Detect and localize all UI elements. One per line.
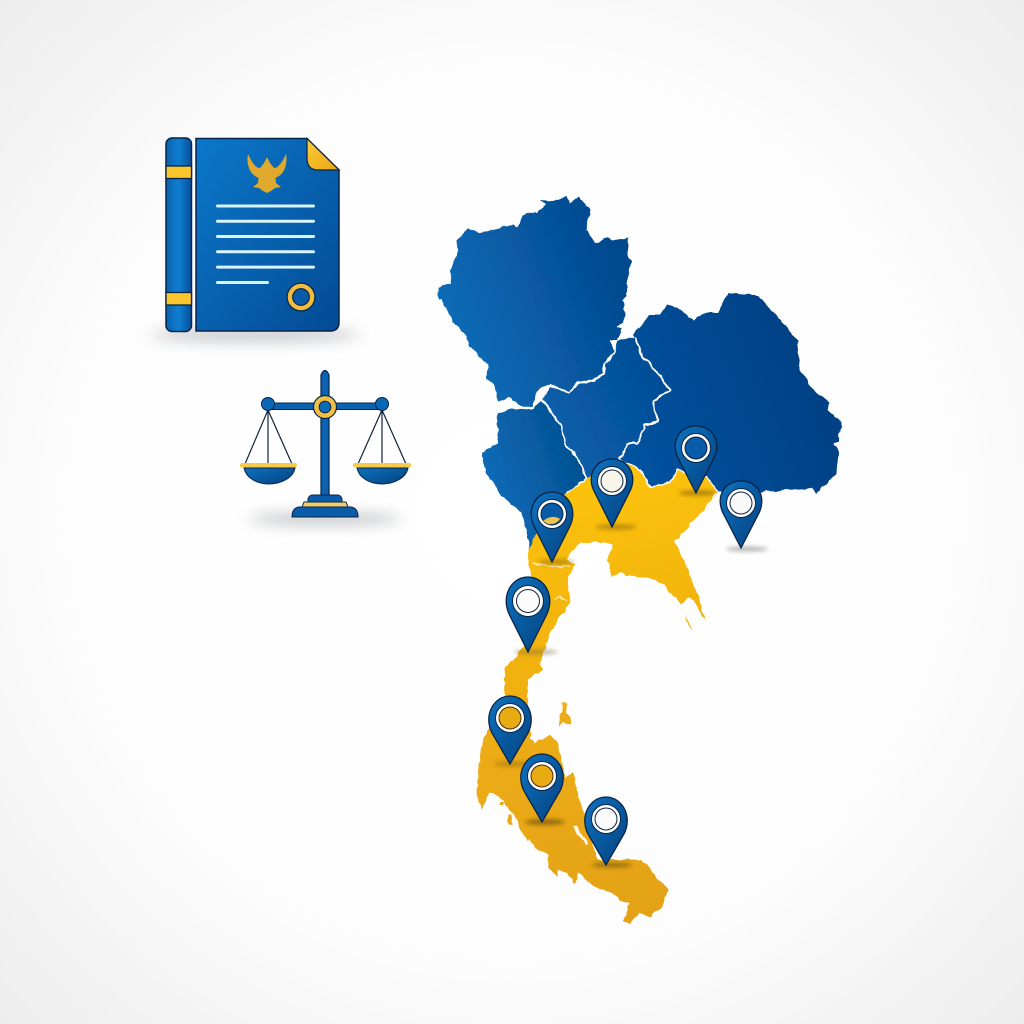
beam bbox=[262, 398, 388, 410]
icon: scales of justice bbox=[240, 370, 411, 525]
map pin 4 bbox=[720, 481, 768, 552]
document text lines bbox=[216, 204, 315, 284]
southern region (gold) bbox=[477, 460, 718, 923]
garuda emblem bbox=[247, 154, 287, 193]
folded corner bbox=[307, 138, 339, 170]
northern region (blue) bbox=[437, 196, 631, 408]
central region (blue) bbox=[543, 337, 670, 478]
small gulf island bbox=[558, 703, 570, 727]
seal bbox=[286, 282, 316, 312]
icon: legal document with spine bbox=[150, 138, 360, 342]
book spine bbox=[166, 138, 192, 332]
map pin 1 bbox=[531, 492, 574, 564]
right pan bbox=[353, 463, 411, 484]
region boundaries bbox=[498, 337, 718, 493]
scales shadow bbox=[249, 513, 401, 525]
map pin 3 bbox=[675, 426, 717, 496]
map pin 6 bbox=[489, 696, 531, 766]
western region (blue) bbox=[482, 400, 587, 548]
white coastal accents bbox=[532, 563, 586, 844]
western island dots bbox=[500, 612, 693, 842]
map pin 7 bbox=[521, 754, 565, 825]
document shadow bbox=[150, 328, 360, 342]
left pan bbox=[240, 463, 297, 484]
post bbox=[321, 370, 329, 497]
strings bbox=[245, 410, 406, 464]
map pin 5 bbox=[506, 577, 558, 654]
eastern region (blue) bbox=[620, 293, 842, 493]
map of Thailand bbox=[437, 196, 842, 923]
map pin 2 bbox=[591, 459, 636, 530]
map pin 8 bbox=[585, 797, 632, 868]
base bbox=[292, 495, 358, 517]
pivot ring bbox=[314, 396, 336, 418]
document page bbox=[196, 138, 339, 331]
